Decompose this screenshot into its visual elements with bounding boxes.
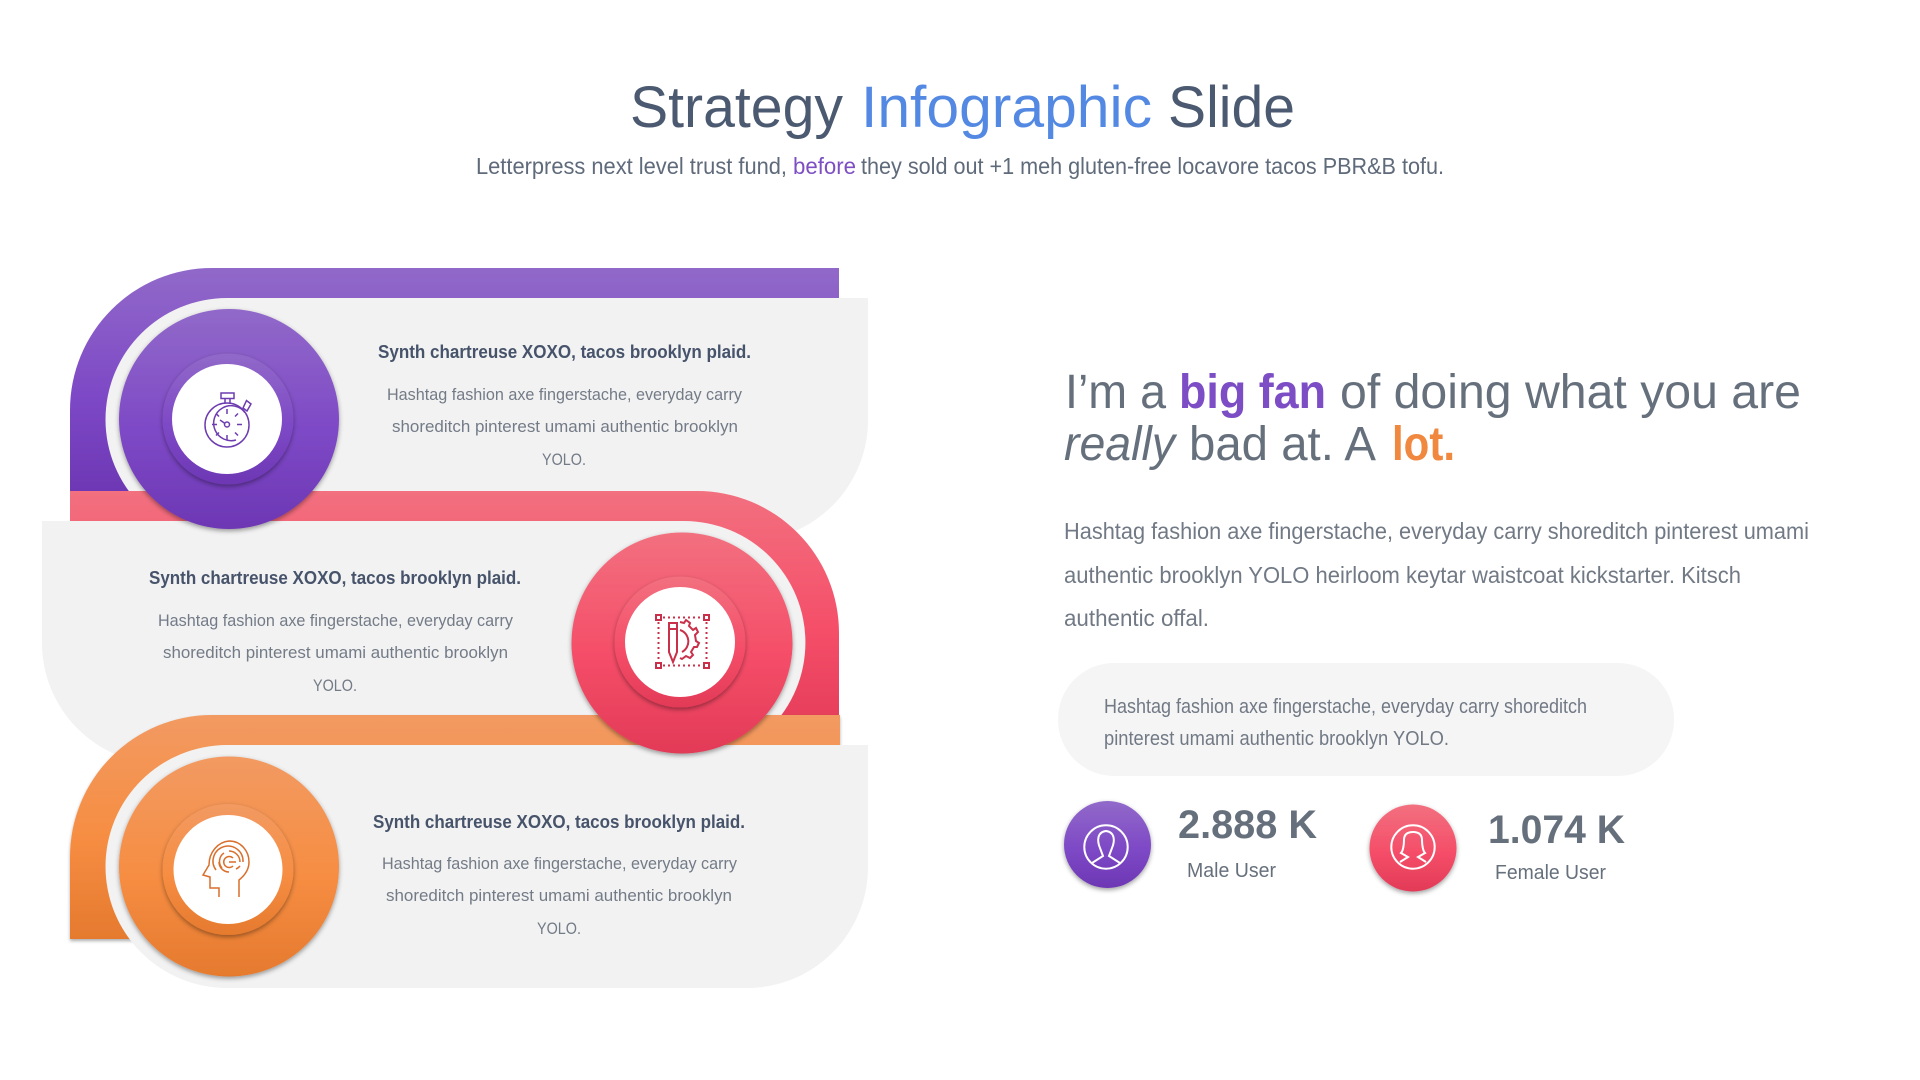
subtitle: Letterpress next level trust fund, bbox=[476, 153, 787, 179]
panel 3 text: shoreditch pinterest umami authentic brooklyn bbox=[386, 886, 732, 905]
subtitle bbox=[476, 153, 1444, 179]
right heading: lot. bbox=[1392, 418, 1455, 471]
right paragraph bbox=[1064, 518, 1809, 631]
panel 3 text: YOLO. bbox=[537, 919, 581, 938]
orange band bbox=[70, 715, 840, 939]
panel 1 text: Synth chartreuse XOXO, tacos brooklyn plaid. bbox=[378, 342, 751, 362]
panel 1 text: shoreditch pinterest umami authentic brooklyn bbox=[392, 417, 738, 436]
panel 2 text: Hashtag fashion axe fingerstache, everyday carry bbox=[158, 611, 513, 630]
right heading: of doing what you are bbox=[1340, 366, 1801, 419]
purple band bbox=[70, 268, 839, 496]
right heading: big fan bbox=[1179, 366, 1326, 419]
panel 1 text: YOLO. bbox=[542, 450, 586, 469]
panel 3 background bbox=[105, 745, 868, 988]
right heading: I’m a bbox=[1065, 366, 1166, 419]
stat: male user bbox=[1064, 801, 1317, 888]
panel 2 text: shoreditch pinterest umami authentic brooklyn bbox=[163, 643, 508, 662]
right heading bbox=[1064, 366, 1801, 471]
callout pill bbox=[1058, 663, 1674, 776]
subtitle: before bbox=[793, 153, 856, 179]
title bbox=[630, 75, 1295, 140]
purple badge bbox=[119, 309, 339, 529]
right heading: bad at. A bbox=[1189, 418, 1376, 471]
panel 1 text: Hashtag fashion axe fingerstache, everyday carry bbox=[387, 385, 742, 404]
icon: stopwatch bbox=[205, 393, 251, 447]
title: Strategy bbox=[630, 75, 843, 140]
title: Infographic bbox=[861, 75, 1152, 140]
right paragraph: authentic offal. bbox=[1064, 605, 1209, 631]
panel 2 background bbox=[42, 521, 805, 764]
panel 3 text bbox=[373, 812, 745, 938]
panel 2 text bbox=[149, 568, 521, 695]
panel 2 text: Synth chartreuse XOXO, tacos brooklyn plaid. bbox=[149, 568, 521, 588]
panel 1 text bbox=[378, 342, 751, 469]
stat: male user: Male User bbox=[1187, 859, 1276, 882]
icon: female user bbox=[1370, 804, 1456, 892]
pink band bbox=[70, 491, 839, 745]
icon: male user bbox=[1064, 801, 1151, 888]
panel 3 text: Hashtag fashion axe fingerstache, everyday carry bbox=[382, 854, 737, 873]
panel 3 text: Synth chartreuse XOXO, tacos brooklyn plaid. bbox=[373, 812, 745, 832]
pink badge bbox=[572, 532, 792, 754]
title: Slide bbox=[1168, 75, 1295, 140]
icon: head with maze bbox=[203, 841, 249, 897]
stat: female user: 1.074 K bbox=[1488, 808, 1625, 852]
stat: female user: Female User bbox=[1495, 861, 1606, 884]
callout pill: pinterest umami authentic brooklyn YOLO. bbox=[1104, 728, 1449, 750]
callout pill: Hashtag fashion axe fingerstache, everyday carry shoreditch bbox=[1104, 696, 1587, 718]
panel 2 text: YOLO. bbox=[313, 676, 357, 695]
right paragraph: authentic brooklyn YOLO heirloom keytar waistcoat kickstarter. Kitsch bbox=[1064, 562, 1741, 588]
right paragraph: Hashtag fashion axe fingerstache, everyday carry shoreditch pinterest umami bbox=[1064, 518, 1809, 544]
orange badge bbox=[119, 756, 339, 976]
panel 1 background bbox=[105, 298, 868, 541]
subtitle: they sold out +1 meh gluten-free locavore tacos PBR&B tofu. bbox=[861, 153, 1444, 179]
icon: pencil and gear bbox=[656, 615, 709, 668]
stat: female user bbox=[1370, 804, 1625, 892]
stat: male user: 2.888 K bbox=[1178, 803, 1317, 847]
right heading: really bbox=[1064, 418, 1178, 471]
